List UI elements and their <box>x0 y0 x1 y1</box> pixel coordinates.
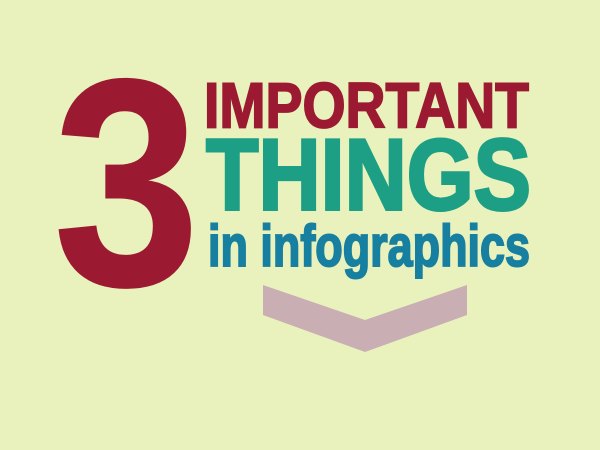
big numeral 3: 3 <box>53 17 200 348</box>
heading: THINGS: THINGS <box>206 120 531 232</box>
heading: IMPORTANT: IMPORTANT <box>204 70 529 142</box>
icon: downward chevron arrow <box>263 285 467 352</box>
